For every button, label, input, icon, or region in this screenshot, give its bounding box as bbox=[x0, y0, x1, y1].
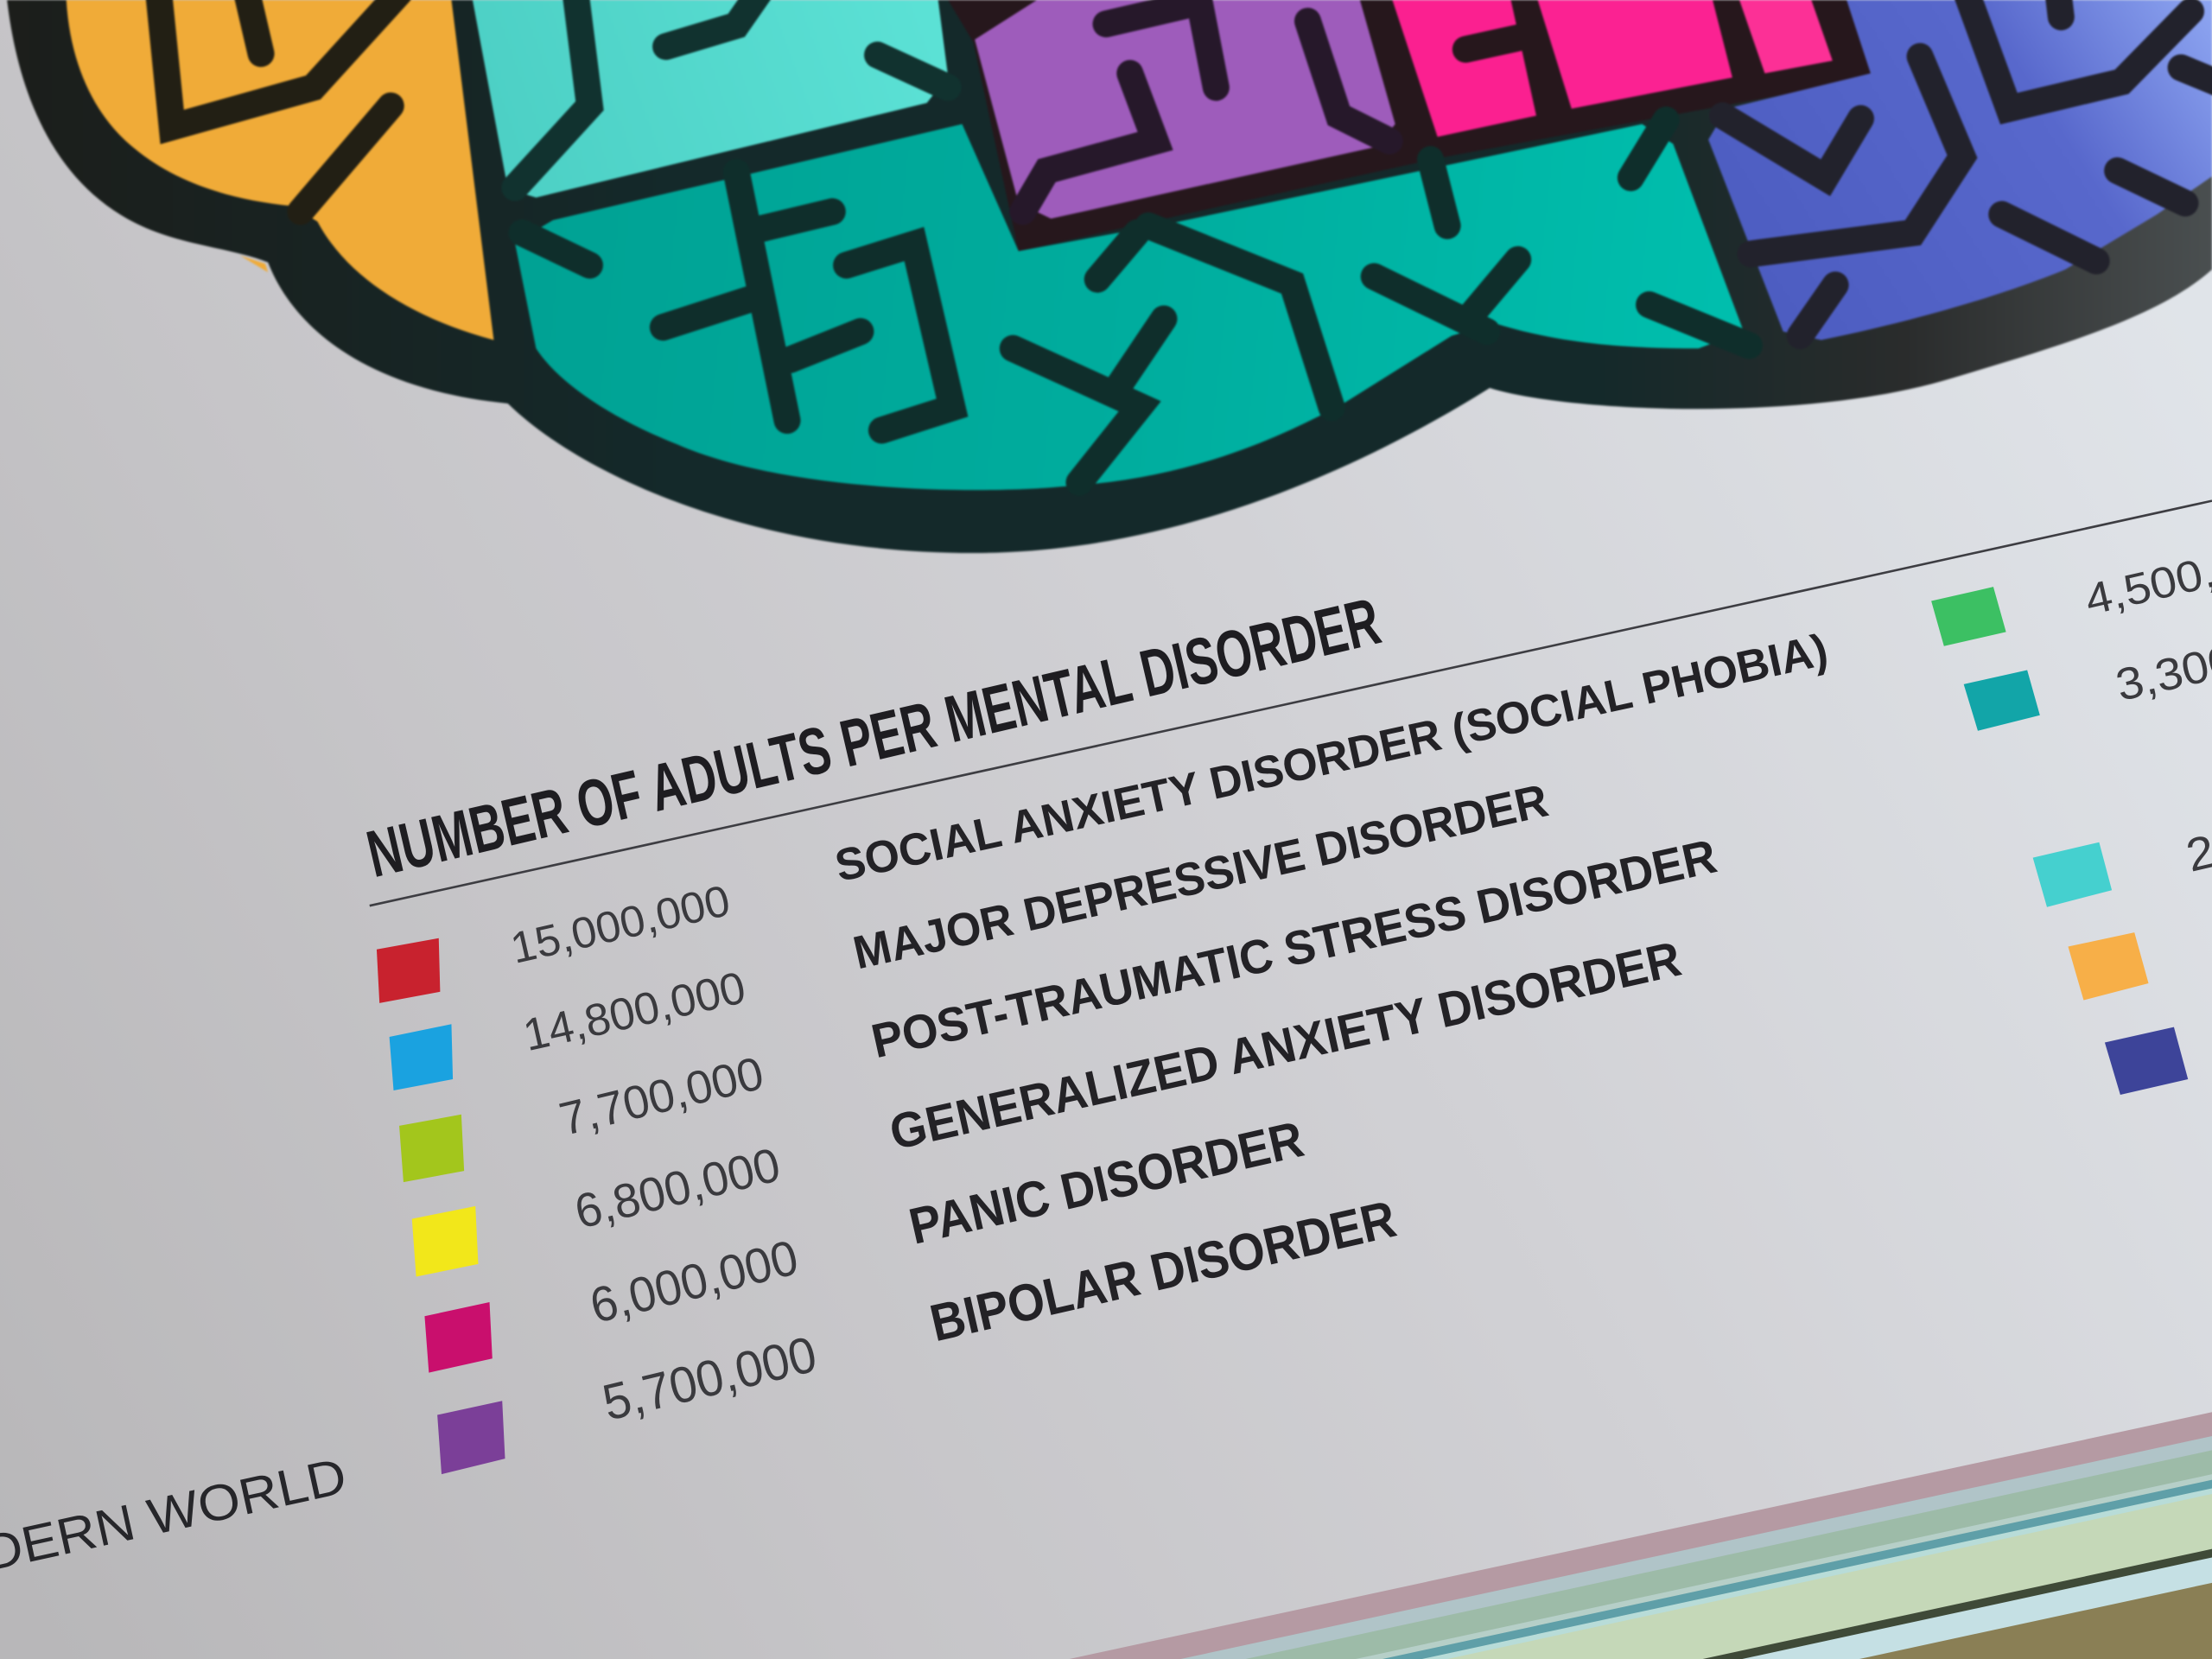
legend: left column bbox=[377, 625, 1832, 1474]
region: purple bbox=[975, 0, 1395, 219]
region: teal bbox=[515, 120, 1749, 490]
row: social anxiety disorder: 15,000,000 bbox=[506, 875, 734, 973]
row: major depressive disorder: 14,800,000 bbox=[519, 963, 750, 1061]
row: post-traumatic stress disorder: POST-TRAUMATIC STRESS DISORDER bbox=[867, 829, 1721, 1068]
brain outline bbox=[7, 0, 2212, 553]
row: bipolar disorder: BIPOLAR DISORDER bbox=[925, 1189, 1402, 1352]
row: post-traumatic stress disorder bbox=[399, 829, 1721, 1182]
row: panic disorder bbox=[424, 1111, 1309, 1373]
row: social anxiety disorder: SOCIAL ANXIETY DISORDER (SOCIAL PHOBIA) bbox=[831, 625, 1832, 892]
row: teal swatch bbox=[1964, 614, 2212, 731]
legend: right column bbox=[1931, 529, 2212, 1095]
book page edges bbox=[1070, 1412, 2212, 1659]
brain illustration bbox=[7, 0, 2212, 553]
row: major depressive disorder: MAJOR DEPRESSIVE DISORDER bbox=[849, 774, 1553, 979]
swatch: orange bbox=[2068, 932, 2149, 1001]
row: bipolar disorder bbox=[437, 1189, 1402, 1474]
row: major depressive disorder bbox=[390, 774, 1553, 1090]
row: generalized anxiety disorder: GENERALIZED ANXIETY DISORDER bbox=[885, 931, 1686, 1160]
swatch: navy bbox=[2105, 1027, 2188, 1095]
row: panic disorder: 6,000,000 bbox=[585, 1230, 804, 1334]
region: turquoise bbox=[473, 0, 948, 198]
region: blue bbox=[1708, 0, 2212, 340]
row: social anxiety disorder bbox=[377, 625, 1832, 1003]
row: post-traumatic stress disorder: 7,700,000 bbox=[555, 1047, 768, 1146]
maroon backing behind pink and purple bbox=[948, 0, 1876, 251]
region: pink bbox=[1392, 0, 1833, 137]
row: bipolar disorder: 5,700,000 bbox=[598, 1326, 822, 1432]
row: green swatch bbox=[1931, 529, 2212, 646]
row: turquoise swatch bbox=[2033, 782, 2212, 907]
row: generalized anxiety disorder: 6,800,000 bbox=[569, 1137, 785, 1239]
heading: number of adults per mental disorder: NUMBER OF ADULTS PER MENTAL DISORDER bbox=[360, 585, 1387, 892]
region: orange lobe bbox=[67, 0, 493, 340]
row: panic disorder: PANIC DISORDER bbox=[904, 1111, 1309, 1255]
row: generalized anxiety disorder bbox=[412, 931, 1686, 1277]
